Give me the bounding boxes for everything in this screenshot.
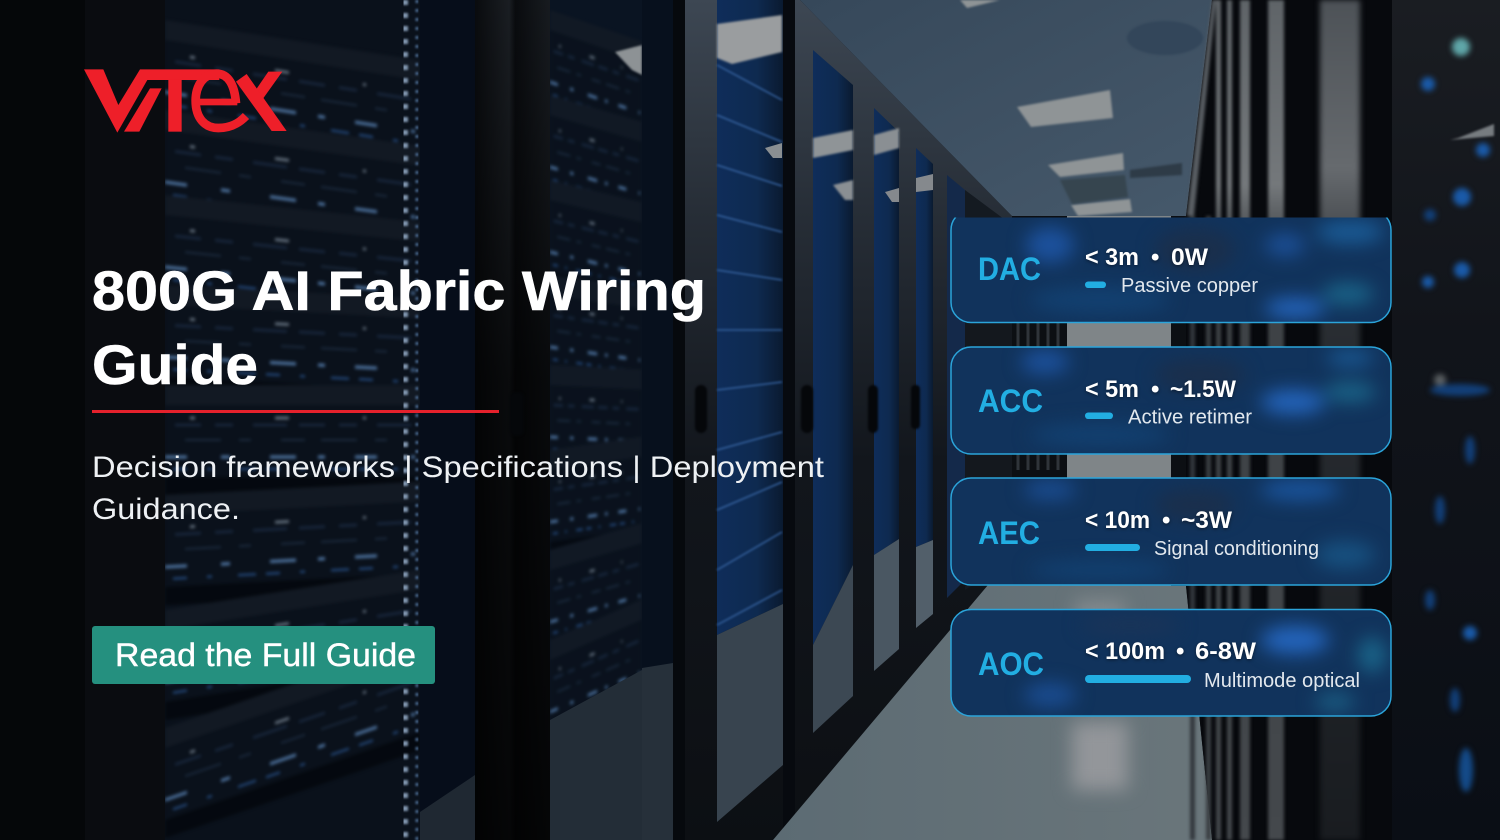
stats: DAC <box>1085 244 1208 271</box>
card: AOC <box>951 610 1391 716</box>
subtitle: Guidance. <box>92 493 240 526</box>
door handles <box>510 385 920 436</box>
button: read the full guide <box>92 626 435 684</box>
ceiling lights <box>960 0 1132 216</box>
stats: ACC: ~1.5W <box>1170 376 1236 403</box>
right rack wall <box>1171 0 1500 840</box>
title underline <box>92 410 499 413</box>
bar: AEC <box>1085 544 1140 551</box>
stats: AOC <box>1085 638 1256 665</box>
label: ACC: ACC <box>978 383 1043 419</box>
description: ACC: Active retimer <box>1128 406 1252 428</box>
ceiling <box>800 0 1212 216</box>
doors receding to the aisle end <box>510 0 1012 840</box>
stats: DAC: 0W <box>1171 244 1208 271</box>
bar: DAC <box>1085 282 1106 288</box>
stats: AEC: • <box>1162 507 1170 534</box>
stats: DAC: < 3m <box>1085 244 1139 271</box>
button: read the full guide: Read the Full Guide <box>115 637 416 673</box>
bar: ACC <box>1085 412 1113 419</box>
description: DAC: Passive copper <box>1121 275 1258 297</box>
stats: AOC: < 100m <box>1085 638 1165 665</box>
subtitle: Decision frameworks | Specifications | Deployment <box>92 451 825 484</box>
stats: AEC <box>1085 507 1232 534</box>
stats: ACC: < 5m <box>1085 376 1139 403</box>
label: AOC: AOC <box>978 646 1044 682</box>
subtitle <box>92 451 825 526</box>
description: AOC: Multimode optical <box>1204 670 1360 692</box>
card: AEC <box>951 478 1391 585</box>
stats: ACC <box>1085 376 1236 403</box>
label: DAC: DAC <box>978 251 1041 287</box>
floor <box>773 585 1212 840</box>
door frames wall <box>642 0 1012 840</box>
description: AEC: Signal conditioning <box>1154 538 1319 560</box>
label: AEC: AEC <box>978 515 1040 551</box>
title: 800G AI Fabric Wiring <box>92 259 706 322</box>
stats: AEC: < 10m <box>1085 507 1150 534</box>
logo: VITEX <box>84 69 287 133</box>
stats: AOC: • <box>1176 638 1184 665</box>
title: Guide <box>92 333 258 396</box>
stats: DAC: • <box>1151 244 1159 271</box>
aisle back wall <box>1012 216 1185 586</box>
stats: AEC: ~3W <box>1181 507 1232 534</box>
bar: AOC <box>1085 675 1191 683</box>
stats: AOC: 6-8W <box>1195 638 1256 665</box>
title <box>92 259 706 396</box>
card: DAC <box>951 210 1391 322</box>
stats: ACC: • <box>1151 376 1159 403</box>
card: ACC <box>951 347 1391 454</box>
